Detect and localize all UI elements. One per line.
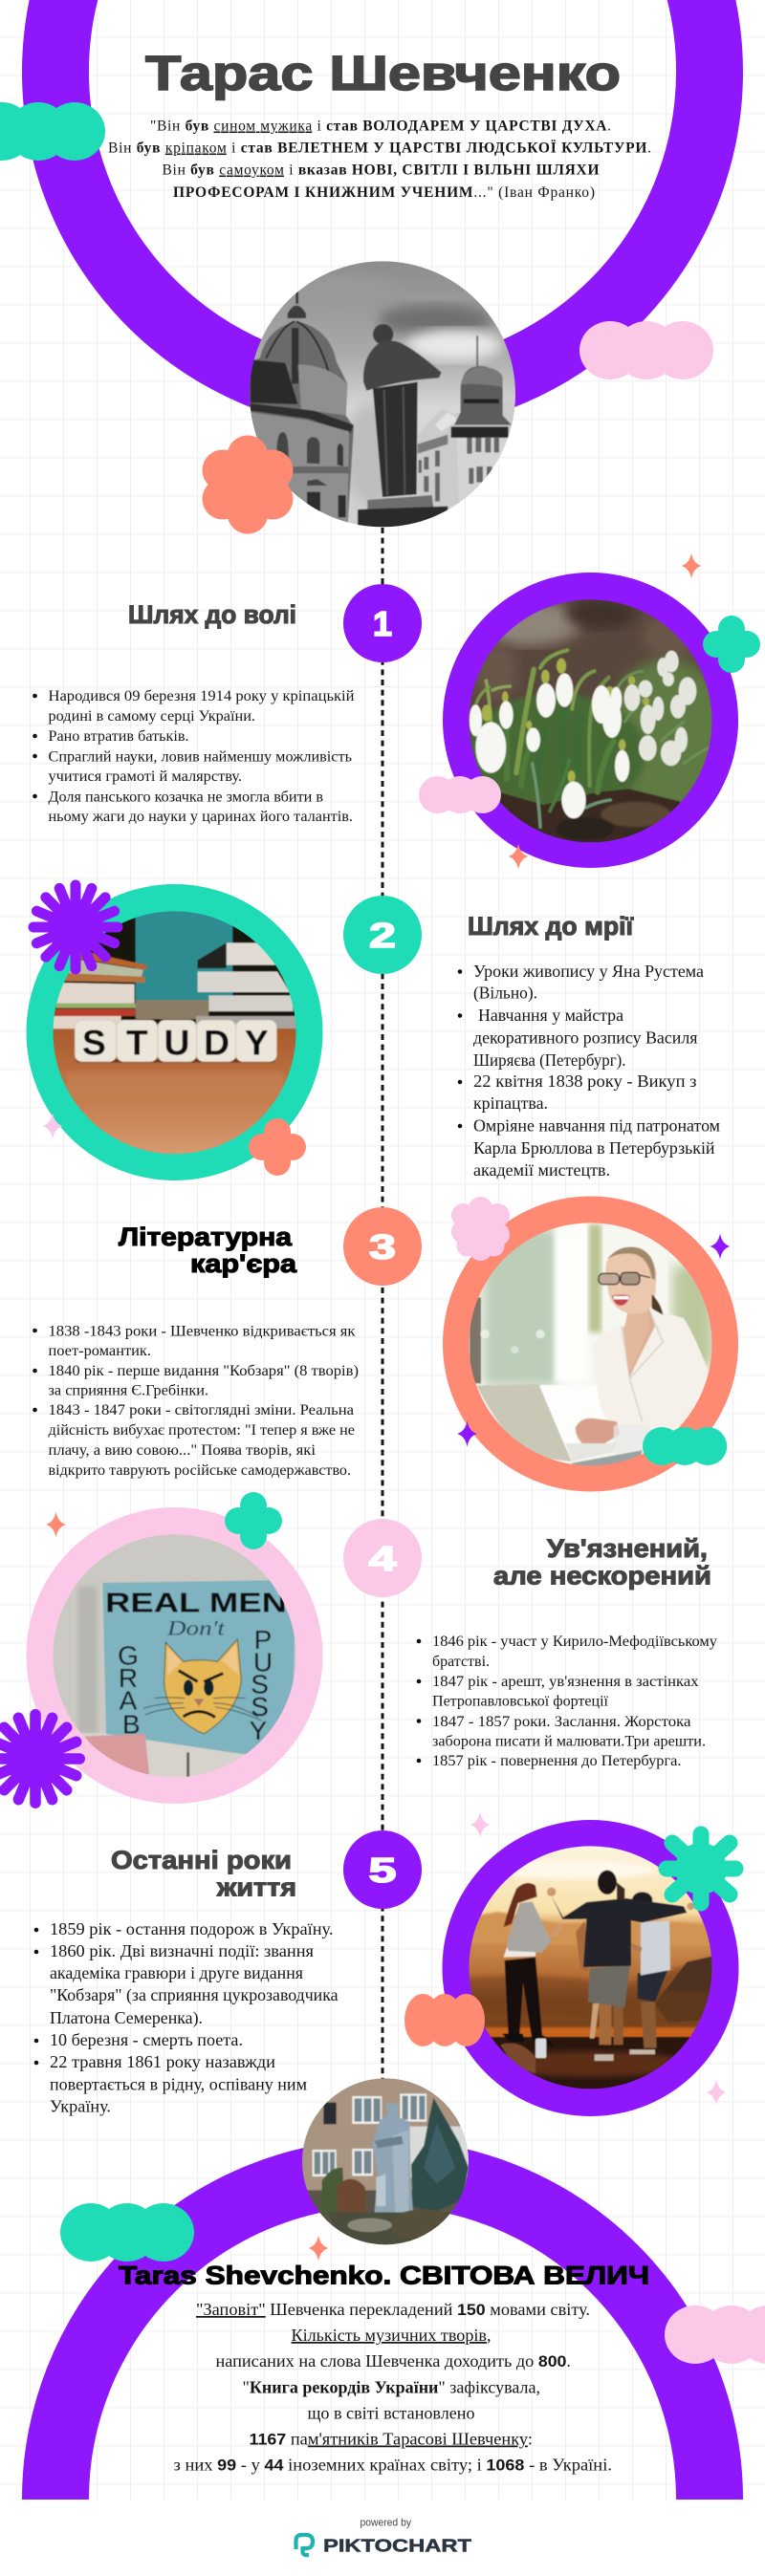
coral cloud, section 5	[404, 1994, 485, 2046]
photo: STUDY dice and books	[48, 906, 301, 1159]
section 2 text: Навчання у майстра	[478, 1006, 623, 1025]
bottom facts text: Кількість музичних творів ,	[291, 2326, 492, 2345]
section 1 text: родині в самому серці України.	[48, 708, 255, 725]
section 2 text: Омріяне навчання під патронатом	[473, 1116, 720, 1136]
bottom purple arch	[55, 2173, 710, 2500]
section 3 heading: Літературна	[119, 1223, 293, 1251]
teal cloud, bottom left	[60, 2203, 194, 2262]
section 4 text: Петропавловської фортеції	[432, 1694, 609, 1709]
photo: STUDY dice and books: Y	[245, 1022, 269, 1062]
section 1 number	[343, 584, 422, 662]
decorative pink cloud, top right	[579, 321, 713, 379]
coral star, section 4	[46, 1512, 66, 1537]
section 3 text: відкрито таврують російське самодержавство.	[48, 1462, 351, 1479]
section 2 text: (Вільно).	[473, 983, 537, 1002]
decorative purple burst, section 2	[33, 885, 118, 969]
teal clover, section 4	[225, 1492, 282, 1549]
section 4 heading: але нескорений	[493, 1562, 711, 1591]
section 5 text: "Кобзаря" (за сприяння цукрозаводчика	[50, 1985, 339, 2004]
section 4 number	[343, 1519, 422, 1597]
photo: protest poster with cat: P	[254, 1625, 272, 1655]
pink flower, section 3	[451, 1197, 510, 1261]
section 2 number: 2	[369, 916, 396, 955]
section 5 number	[343, 1830, 422, 1909]
section 1 text	[33, 688, 355, 825]
section 5 number: 5	[369, 1851, 396, 1890]
section 3 text: поет-романтик.	[48, 1343, 151, 1359]
section 5 text: академіка гравюри і друге видання	[50, 1963, 303, 1982]
photo: protest poster with cat: B	[122, 1709, 141, 1739]
photo: friends at sunset	[464, 1841, 717, 2094]
quote by Ivan Franko: Він був самоуком і вказав НОВІ, СВІТЛІ І ВІЛЬНІ ШЛЯХИ	[163, 162, 599, 178]
quote by Ivan Franko	[108, 119, 651, 201]
section 2 text: Карла Брюллова в Петербурзькій	[473, 1138, 715, 1158]
section 5 text: 1859 рік - остання подорож в Україну.	[50, 1919, 333, 1938]
photo: STUDY dice and books: T	[126, 1022, 148, 1062]
timeline dashed line	[381, 528, 384, 2080]
section 5 text	[34, 1919, 339, 2116]
pink star, section 5 bottom	[706, 2080, 727, 2105]
section 3 heading	[119, 1223, 297, 1278]
section 5 text: Платона Семеренка).	[50, 2008, 203, 2027]
teal asterisk, section 5	[667, 1834, 735, 1903]
bottom heading: Taras Shevchenko. СВІТОВА ВЕЛИЧ	[119, 2262, 649, 2290]
star, section 1 bottom	[509, 843, 528, 870]
section 3 text: дійсність вибухає протестом: "І тепер я вже не	[48, 1422, 355, 1439]
purple burst, section 4	[0, 1715, 79, 1803]
quote by Ivan Franko: Він був кріпаком і став ВЕЛЕТНЕМ У ЦАРСТВІ ЛЮДСЬКОЇ КУЛЬТУРИ.	[108, 140, 651, 157]
photo: protest poster with cat	[48, 1529, 301, 1783]
section 1 ring	[443, 573, 738, 868]
photo: Shevchenko statue	[302, 2078, 469, 2244]
section 5 text: 22 травня 1861 року назавжди	[50, 2052, 275, 2071]
photo: protest poster with cat: S	[251, 1692, 269, 1721]
bottom facts text: що в світі встановлено	[308, 2403, 475, 2422]
decorative coral flower	[203, 436, 293, 533]
photo: protest poster with cat: G	[118, 1641, 139, 1671]
section 1 text: ньому жаги до науки у царинах його талантів.	[48, 809, 353, 825]
section 4 heading: Ув'язнений,	[547, 1534, 708, 1563]
section 3 text: 1843 - 1847 роки - світоглядні зміни. Реальна	[48, 1402, 354, 1418]
photo: protest poster with cat: REAL MEN	[105, 1589, 287, 1619]
section 2 ring	[27, 884, 323, 1180]
decorative teal cloud, top left	[0, 102, 105, 161]
decorative teal clover, section 1	[703, 616, 760, 673]
footer: powered by Piktochart	[296, 2518, 472, 2556]
photo: STUDY dice and books: U	[164, 1022, 189, 1062]
section 5 ring	[442, 1820, 738, 2116]
bottom facts text: "Заповіт" Шевченка перекладений 150 мовами світу.	[196, 2300, 590, 2319]
top purple ring	[55, 0, 710, 399]
section 3 text: 1840 рік - перше видання "Кобзаря" (8 творів)	[48, 1363, 359, 1379]
section 5 heading: життя	[216, 1873, 296, 1902]
photo: smiling woman at laptop	[464, 1218, 717, 1471]
photo: snowdrops	[469, 599, 711, 843]
section 5 heading	[111, 1846, 296, 1902]
section 3 number: 3	[369, 1227, 396, 1266]
pink star, section 5 top	[470, 1812, 490, 1837]
section 3 text: 1838 -1843 роки - Шевченко відкривається як	[48, 1323, 356, 1340]
section 3 text: плачу, а вию совою..." Поява творів, які	[48, 1442, 317, 1459]
section 5 heading: Останні роки	[111, 1846, 292, 1874]
photo: protest poster with cat: U	[253, 1647, 273, 1677]
pink cloud, bottom right	[665, 2305, 765, 2364]
section 2 text: Ширяєва (Петербург).	[473, 1050, 625, 1070]
section 1 text: Спраглий науки, ловив найменшу можливість	[48, 749, 352, 765]
bottom facts text: написаних на слова Шевченка доходить до 800.	[216, 2351, 571, 2370]
section 2 text: декоративного розпису Василя	[473, 1028, 698, 1048]
section 4 text: 1847 - 1857 роки. Заслання. Жорстока	[432, 1714, 690, 1730]
section 2 text: Уроки живопису у Яна Рустема	[473, 962, 704, 981]
photo: Shevchenko monument, black and white	[244, 256, 521, 533]
section 4 text: братстві.	[432, 1654, 490, 1670]
section 2 text: академії мистецтв.	[473, 1160, 610, 1180]
photo: protest poster with cat: Don't	[166, 1616, 226, 1640]
section 3 number	[343, 1207, 422, 1286]
coral star, bottom	[308, 2235, 329, 2262]
bottom facts text: "Книга рекордів України " зафіксувала,	[243, 2378, 540, 2397]
purple star, section 3 left	[457, 1420, 477, 1447]
section 3 ring	[443, 1197, 738, 1491]
section 5 text: 1860 рік. Дві визначні події: звання	[50, 1941, 314, 1960]
footer: powered by Piktochart: PIKTOCHART	[323, 2535, 472, 2556]
section 5 text: Україну.	[50, 2097, 111, 2116]
section 2 number	[343, 896, 422, 974]
teal cloud, section 3	[643, 1427, 727, 1465]
photo: STUDY dice and books: S	[82, 1022, 106, 1062]
section 2 text: 22 квітня 1838 року - Викуп з	[473, 1072, 697, 1091]
section 4 number: 4	[369, 1539, 396, 1578]
photo: protest poster with cat: Y	[250, 1716, 268, 1745]
section 4 text: 1857 рік - повернення до Петербурга.	[432, 1753, 681, 1769]
bottom facts text: з них 99 - у 44 іноземних країнах світу; і 1068 - в Україні.	[174, 2455, 612, 2474]
section 4 text: 1846 рік - участ у Кирило-Мефодіївському	[432, 1634, 717, 1650]
coral clover, section 2	[249, 1118, 306, 1176]
title: Тарас Шевченко	[145, 46, 621, 100]
section 1 text: учитися грамоті й малярству.	[48, 768, 242, 785]
section 1 text: Народився 09 березня 1914 року у кріпацькій	[48, 688, 355, 704]
icon: Piktochart logo	[296, 2535, 313, 2555]
bottom facts text	[174, 2300, 612, 2474]
section 3 heading: кар'єра	[190, 1249, 297, 1278]
section 4 text: заборона писати й малювати.Три арешти.	[432, 1734, 706, 1749]
section 1 text: Доля панського козачка не змогла вбити в	[48, 790, 323, 805]
section 4 heading	[493, 1534, 711, 1591]
section 1 number: 1	[373, 604, 392, 643]
section 5 text: 10 березня - смерть поета.	[50, 2030, 243, 2049]
footer: powered by Piktochart: powered by	[360, 2518, 411, 2529]
section 2 heading: Шлях до мрії	[468, 912, 634, 941]
section 2 text	[458, 962, 720, 1180]
photo: protest poster with cat: R	[119, 1663, 138, 1693]
photo: protest poster with cat: A	[120, 1685, 138, 1715]
section 2 text: кріпацтва.	[473, 1093, 548, 1113]
quote by Ivan Franko: ПРОФЕСОРАМ І КНИЖНИМ УЧЕНИМ..." (Іван Франко)	[173, 184, 595, 201]
photo: protest poster with cat: S	[251, 1670, 269, 1699]
decorative pink cloud, section 1	[419, 776, 501, 813]
star, section 1 top	[681, 552, 702, 579]
section 4 ring	[27, 1507, 323, 1804]
section 1 text: Рано втратив батьків.	[48, 728, 189, 745]
section 4 text	[417, 1634, 717, 1769]
section 5 text: повертається в рідну, оспівану ним	[50, 2074, 307, 2093]
quote by Ivan Franko: "Він був сином мужика і став ВОЛОДАРЕМ У ЦАРСТВІ ДУХА.	[150, 119, 611, 134]
section 3 text	[33, 1323, 359, 1479]
pink star, section 2	[42, 1113, 63, 1139]
section 4 text: 1847 рік - арешт, ув'язнення в застінках	[432, 1674, 698, 1690]
section 1 heading: Шлях до волі	[128, 600, 296, 629]
bottom facts text: 1167 пам'ятників Тарасові Шевченку :	[249, 2430, 533, 2449]
purple star, section 3 right	[710, 1233, 731, 1260]
photo: STUDY dice and books: D	[204, 1022, 230, 1062]
section 3 text: за сприяння Є.Гребінки.	[48, 1382, 208, 1399]
